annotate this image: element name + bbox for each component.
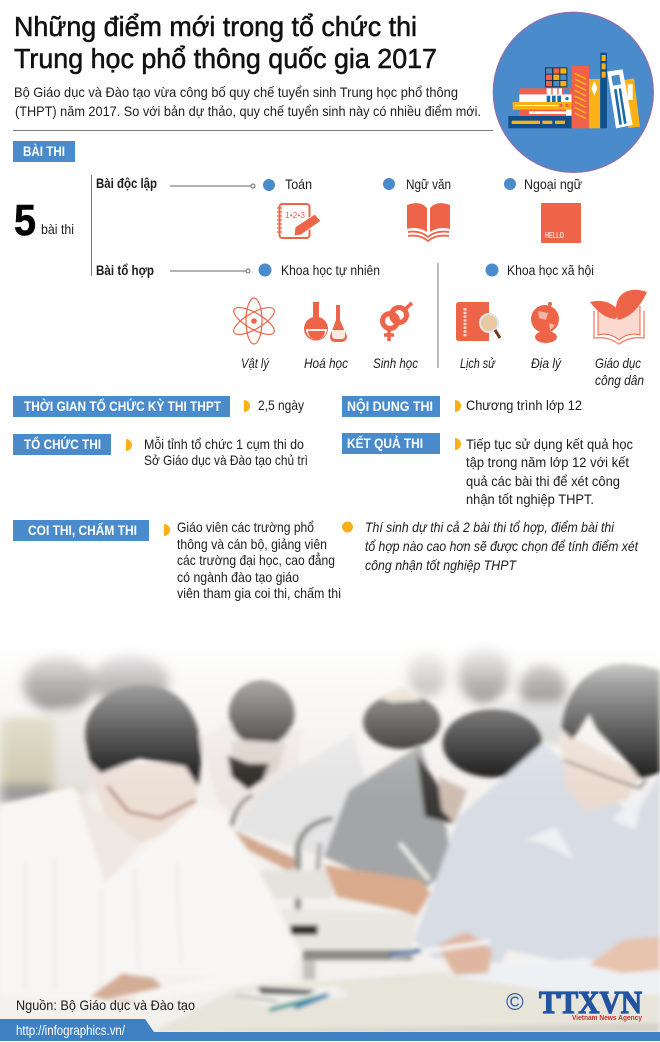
title: Những điểm mới trong tổ chức thi	[14, 11, 417, 42]
icon: notebook and pencil	[277, 204, 321, 238]
section: tổ chức thi: TỔ CHỨC THI	[24, 437, 101, 452]
section: nội dung thi: NỘI DUNG THI	[347, 399, 433, 414]
subject group: bài tổ hợp: Khoa học tự nhiên	[281, 262, 380, 278]
section: nội dung thi: Chương trình lớp 12	[466, 397, 582, 413]
icon: open book	[407, 203, 450, 241]
logo: TTXVN: TTXVN	[539, 984, 642, 1020]
intro text: (THPT) năm 2017. So với bản dự thảo, quy chế tuyển sinh này có nhiều điểm mới.	[15, 103, 481, 119]
section: kết quả thi: Tiếp tục sử dụng kết quả học	[466, 436, 633, 452]
icon: globe	[531, 302, 559, 343]
section: kết quả thi: tập trong năm lớp 12 với kết	[466, 454, 629, 470]
section: tổ chức thi: Sở Giáo dục và Đào tạo chủ trì	[144, 452, 308, 468]
labels: subject names: công dân	[595, 372, 644, 388]
number: 5 bài thi: 5	[14, 196, 36, 245]
chair	[298, 818, 332, 913]
fade into white	[0, 630, 660, 1042]
number: 5 bài thi: bài thi	[41, 221, 74, 237]
footer bar with url: http://infographics.vn/	[16, 1023, 125, 1038]
labels: subject names: Địa lý	[531, 355, 562, 371]
section: coi thi, chấm thi	[13, 519, 341, 601]
section: coi thi, chấm thi: thông và cán bộ, giảng viên	[177, 536, 327, 552]
right student	[414, 743, 660, 967]
subject group: bài độc lập: Ngoại ngữ	[524, 176, 582, 192]
logo: TTXVN	[506, 984, 642, 1022]
section: tổ chức thi	[13, 434, 308, 468]
logo: TTXVN: Vietnam News Agency	[572, 1015, 642, 1022]
labels: subject names: Giáo dục	[595, 355, 641, 371]
section: thời gian tổ chức: THỜI GIAN TỔ CHỨC KỲ THI THPT	[24, 399, 222, 414]
section: kết quả thi: KẾT QUẢ THI	[347, 436, 423, 451]
section: coi thi, chấm thi: Giáo viên các trường phổ	[177, 519, 314, 535]
labels: subject names: Hoá học	[304, 355, 348, 371]
icon: notebook and pencil: 1•2•3	[285, 211, 306, 220]
logo: TTXVN: ©	[506, 989, 524, 1016]
heading: bài thi: BÀI THI	[23, 144, 65, 159]
labels: subject names: Sinh học	[373, 355, 418, 371]
icon: flasks	[304, 302, 347, 342]
back students	[198, 720, 303, 843]
source: Nguồn: Bộ Giáo dục và Đào tạo	[16, 997, 195, 1013]
intro text	[14, 84, 481, 119]
icon: hello book	[541, 203, 581, 243]
icon: open book with leaves	[590, 290, 647, 344]
section: coi thi, chấm thi: có ngành đào tạo giáo	[177, 569, 299, 585]
section: thời gian tổ chức: 2,5 ngày	[258, 397, 304, 413]
icon: hello book: HELLO	[545, 231, 564, 240]
section: kết quả thi: nhận tốt nghiệp THPT.	[466, 491, 594, 507]
note: highlighted italic note: công nhận tốt nghiệp THPT	[365, 557, 517, 573]
labels: subject names	[241, 355, 644, 388]
title	[14, 11, 437, 74]
section: coi thi, chấm thi: COI THI, CHẤM THI	[28, 523, 137, 538]
subject group: bài tổ hợp: Khoa học xã hội	[507, 262, 594, 278]
subject group: bài độc lập: Ngữ văn	[406, 176, 451, 192]
divider between science groups	[438, 263, 439, 368]
grey shirt student	[324, 745, 452, 888]
labels: subject names: Lịch sử	[460, 355, 496, 371]
subject group: bài tổ hợp	[96, 262, 594, 278]
bracket line	[91, 175, 92, 276]
heading: bài thi	[13, 141, 75, 162]
number: 5 bài thi	[14, 196, 74, 245]
subject group: bài độc lập: Bài độc lập	[96, 175, 157, 191]
photo: students taking the exam	[0, 630, 660, 1042]
left student	[0, 787, 300, 1000]
subject group: bài tổ hợp: Bài tổ hợp	[96, 262, 154, 278]
icon: atom	[230, 298, 278, 344]
note: highlighted italic note	[342, 519, 639, 573]
section: kết quả thi	[342, 433, 633, 507]
section: coi thi, chấm thi: các trường đại học, cao đẳng	[177, 551, 335, 568]
intro text: Bộ Giáo dục và Đào tạo vừa công bố quy chế tuyển sinh Trung học phổ thông	[14, 84, 458, 100]
icon: books in blue circle	[493, 12, 653, 172]
middle desk	[261, 870, 332, 898]
subject group: bài độc lập	[96, 175, 582, 192]
labels: subject names: Vật lý	[241, 355, 270, 371]
icon: gender symbols	[382, 303, 412, 341]
footer bar with url	[0, 1019, 660, 1041]
section: nội dung thi	[342, 396, 582, 417]
section: coi thi, chấm thi: viên tham gia coi thi, chấm thi	[177, 585, 341, 601]
front desk	[151, 972, 660, 1032]
icon: history book and magnifier	[456, 302, 500, 341]
section: kết quả thi: quả các bài thi để xét công	[466, 473, 620, 489]
subject group: bài độc lập: Toán	[285, 176, 312, 192]
section: tổ chức thi: Mỗi tỉnh tổ chức 1 cụm thi do	[144, 436, 304, 452]
title: Trung học phổ thông quốc gia 2017	[14, 43, 437, 74]
section: thời gian tổ chức	[13, 396, 304, 417]
note: highlighted italic note: Thí sinh dự thi cả 2 bài thi tổ hợp, điểm bài thi	[365, 519, 615, 535]
